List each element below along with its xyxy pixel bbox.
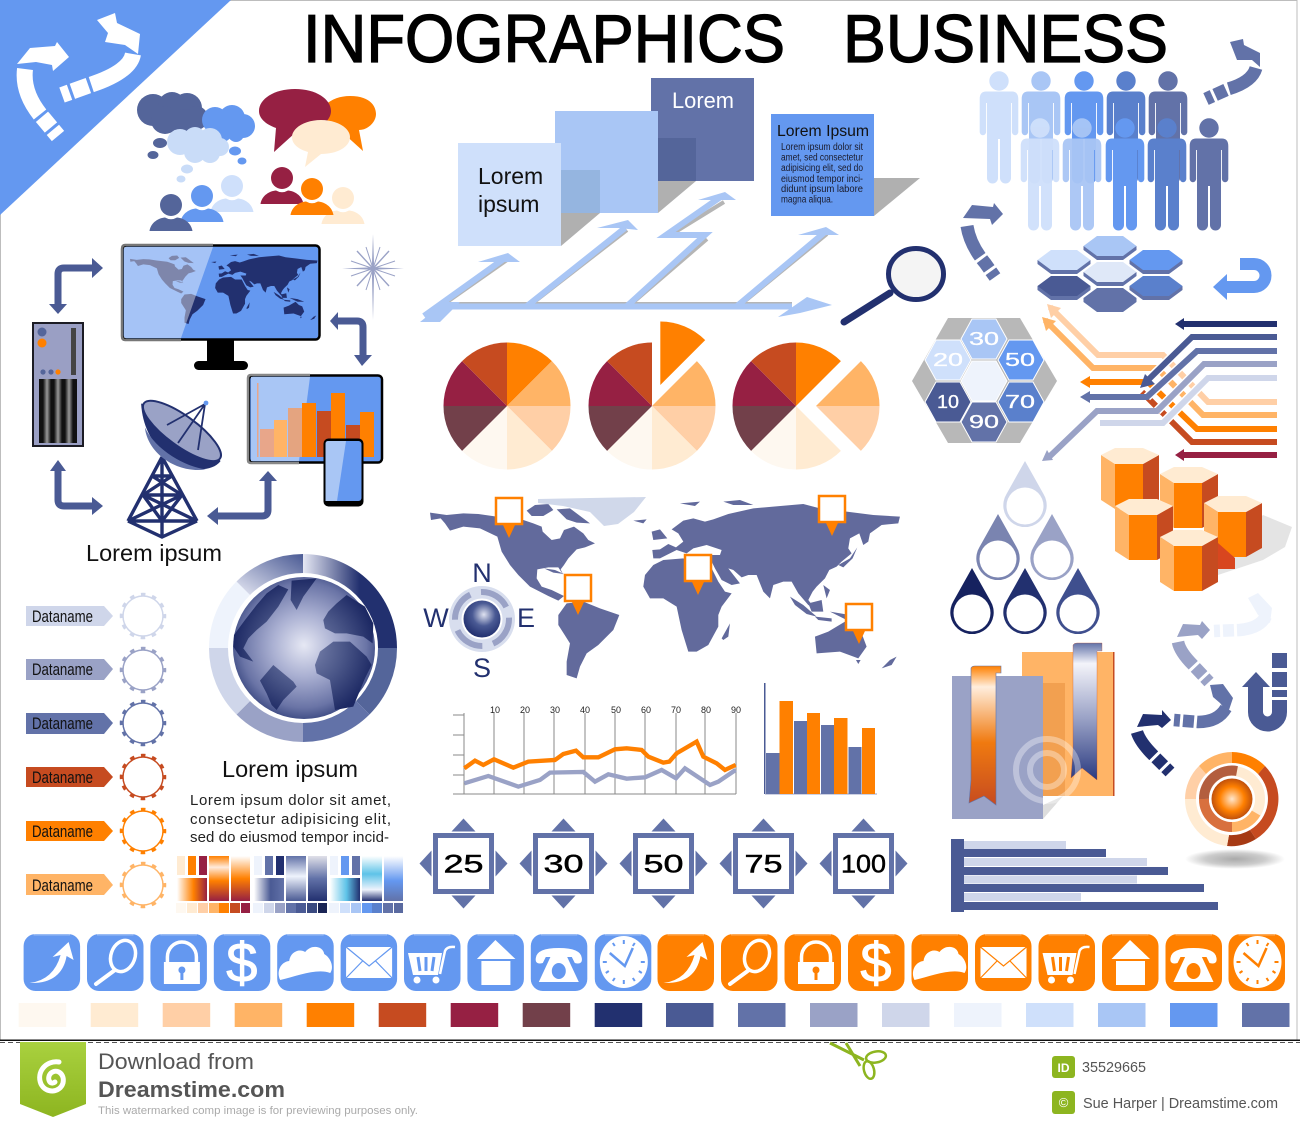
footer copyright — [1052, 1091, 1278, 1114]
thought clouds — [137, 92, 255, 182]
icon: blue dollar tile — [214, 931, 270, 994]
world map — [430, 496, 900, 678]
data label row 6: Dataname — [32, 876, 93, 895]
arrow: server to dish — [50, 460, 103, 515]
arrow: lavender segmented — [1177, 621, 1210, 682]
colour palette swatches — [19, 1003, 1290, 1027]
icon: dreamstime ribbon — [20, 1042, 86, 1117]
globe caption: Lorem ipsum — [222, 756, 358, 782]
icon: blue phone tile — [531, 934, 587, 991]
icon: monitor with world map — [122, 245, 320, 370]
footer image id: 35529665 — [1082, 1060, 1146, 1076]
compass: W — [423, 603, 449, 633]
icon: orange lock tile — [784, 934, 841, 991]
icon: orange cloud tile — [912, 934, 968, 991]
data label row 5 — [26, 810, 164, 852]
number tile 100: 100 — [841, 850, 886, 878]
number 90: 90 — [969, 412, 999, 432]
text box panel: Lorem ipsum dolor sit — [781, 142, 863, 153]
corner banner — [0, 0, 231, 215]
folders with ribbons — [952, 643, 1114, 819]
text box panel: amet, sed consectetur — [781, 152, 864, 164]
ribbon: silver — [1071, 643, 1102, 780]
arrow: light segmented — [1214, 593, 1272, 631]
icon: blue cart tile — [404, 934, 460, 991]
icon: blue mail tile — [341, 934, 397, 991]
globe paragraph: consectetur adipisicing elit, — [190, 811, 391, 828]
arrow: monitor to tablet — [330, 312, 372, 366]
icon: blue search tile — [87, 934, 144, 991]
people pictogram rows — [980, 71, 1228, 230]
map pin: north america — [496, 498, 522, 538]
icon: orange dollar tile — [848, 931, 904, 994]
bar chart — [764, 683, 877, 794]
globe paragraph: Lorem ipsum dolor sit amet, — [190, 792, 391, 809]
map pin: asia — [819, 496, 845, 536]
line chart: 60 — [641, 705, 651, 715]
number 30: 30 — [969, 329, 999, 349]
gradient swatch block orange — [176, 856, 250, 913]
title: INFOGRAPHICS — [303, 1, 785, 77]
footer download text: Dreamstime.com — [98, 1077, 285, 1102]
text box panel: adipisicing elit, sed do — [781, 163, 863, 174]
title — [303, 1, 1168, 77]
line chart: 10 — [490, 705, 500, 715]
icon: chart monitor and phone — [248, 375, 382, 506]
arrow: blue u-turn — [1213, 264, 1266, 300]
icon: blue arrow tile — [24, 934, 80, 991]
line chart: 90 — [731, 705, 741, 715]
gradient swatch block navy — [253, 856, 327, 913]
label: network caption: Lorem ipsum — [86, 540, 222, 566]
globe paragraph — [190, 792, 391, 846]
number tile 25 — [420, 818, 508, 908]
arrow: slate segmented — [1174, 684, 1233, 722]
pie chart: complete — [444, 342, 570, 470]
number 20: 20 — [933, 350, 963, 370]
globe with ring — [209, 554, 397, 742]
number tile 75: 75 — [744, 850, 782, 878]
footer download text: This watermarked comp image is for previewing purposes only. — [98, 1105, 418, 1117]
icon: satellite dish tower — [123, 390, 230, 537]
hexagon number chart — [912, 318, 1057, 443]
arrow: mid segmented — [963, 203, 1003, 277]
ribbon: orange — [969, 666, 1001, 805]
data label row 4: Dataname — [32, 768, 93, 787]
arrow: u-shaped up — [1242, 653, 1288, 724]
greenland — [538, 497, 646, 526]
horizontal bar chart — [951, 839, 1218, 912]
map pin: africa — [685, 555, 711, 595]
number tile 50 — [620, 818, 708, 908]
text box panel — [771, 114, 920, 216]
icon: magnifying glass — [844, 248, 944, 322]
arrow: server to monitor — [49, 258, 103, 314]
line chart: 50 — [611, 705, 621, 715]
icon: orange mail tile — [975, 934, 1032, 991]
icon: compass star — [342, 234, 404, 320]
pie chart: one slice exploded — [588, 322, 716, 470]
data label row 2 — [26, 648, 164, 692]
icon: blue dollar tile: $ — [226, 931, 257, 994]
icon: scissors — [830, 1043, 887, 1080]
data label row 6 — [26, 864, 164, 906]
arrow: navy segmented — [1137, 710, 1171, 772]
data label row 5: Dataname — [32, 822, 93, 841]
number 50: 50 — [1005, 350, 1035, 370]
number tile 75 — [720, 818, 808, 908]
footer image id: ID — [1058, 1061, 1070, 1075]
icon: phone — [324, 438, 364, 506]
map pin: south america — [565, 575, 591, 615]
stacked squares panel — [458, 78, 754, 246]
icon: corner arrow lower — [17, 42, 69, 136]
pie chart: two slices exploded — [732, 342, 880, 470]
data label row 3: Dataname — [32, 714, 93, 733]
number tile 100 — [820, 818, 908, 908]
footer image id — [1052, 1056, 1146, 1078]
footer divider — [0, 1040, 1300, 1042]
text: lorem ipsum step: ipsum — [478, 191, 539, 217]
title: BUSINESS — [843, 1, 1168, 77]
number 70: 70 — [1005, 392, 1035, 412]
compass: S — [473, 653, 491, 683]
line chart: 80 — [701, 705, 711, 715]
data label row 3 — [26, 702, 164, 744]
icon: corner arrow upper — [62, 13, 140, 95]
compass: E — [517, 603, 535, 633]
footer copyright: © — [1059, 1095, 1069, 1110]
icon: orange arrow tile — [658, 934, 714, 991]
teardrop pyramid — [950, 461, 1100, 634]
footer download text — [98, 1049, 418, 1117]
text: lorem ipsum step: Lorem — [478, 163, 543, 189]
icon: orange cart tile — [1038, 934, 1095, 991]
line chart: 70 — [671, 705, 681, 715]
line chart: 40 — [580, 705, 590, 715]
number tile 30 — [520, 818, 608, 908]
text box panel: didunt ipsum labore — [781, 184, 864, 195]
icon: orange house tile — [1102, 934, 1158, 991]
text: lorem top step: Lorem — [672, 88, 734, 113]
arrow: top right segmented — [1206, 39, 1260, 99]
text box panel: eiusmod tempor inci- — [781, 174, 863, 185]
footer copyright: Sue Harper | Dreamstime.com — [1083, 1096, 1278, 1112]
footer download text: Download from — [98, 1049, 254, 1074]
icon: server tower — [33, 323, 83, 446]
icon: blue house tile — [467, 934, 524, 991]
icon: orange search tile — [721, 934, 778, 991]
data label row 1: Dataname — [32, 607, 93, 626]
icon: orange dollar tile: $ — [860, 931, 892, 994]
compass — [423, 558, 535, 683]
map pin: australia — [846, 604, 872, 644]
arrow: dish to tablet — [207, 471, 277, 525]
orange hex prisms — [1101, 448, 1292, 591]
line chart: 20 — [520, 705, 530, 715]
icon: blue cloud tile — [277, 934, 334, 991]
data label row 2: Dataname — [32, 660, 93, 679]
crossing line arrows — [1042, 304, 1277, 461]
number tile 50: 50 — [644, 850, 684, 878]
number tile 25: 25 — [444, 850, 484, 878]
target donut — [1185, 752, 1285, 869]
icon: orange clock tile — [1228, 934, 1285, 991]
hexagon cluster 3D — [1038, 236, 1182, 312]
icon: blue lock tile — [150, 934, 207, 991]
arrow diagram: branching light blue arrows — [420, 192, 839, 322]
globe paragraph: sed do eiusmod tempor incid- — [190, 829, 389, 846]
text box panel: Lorem Ipsum — [777, 123, 869, 140]
data label row 4 — [26, 756, 164, 798]
line chart — [453, 705, 741, 794]
text box panel: magna aliqua. — [781, 194, 833, 206]
data label row 1 — [26, 594, 164, 638]
icon: orange phone tile — [1166, 934, 1222, 991]
compass: N — [472, 558, 492, 588]
number tile 30: 30 — [544, 850, 584, 878]
number 10: 10 — [937, 392, 959, 412]
icon: blue clock tile — [595, 934, 651, 991]
people busts group — [150, 167, 364, 231]
gradient swatch block blue — [329, 856, 403, 913]
line chart: 30 — [550, 705, 560, 715]
speech bubbles — [259, 89, 376, 167]
